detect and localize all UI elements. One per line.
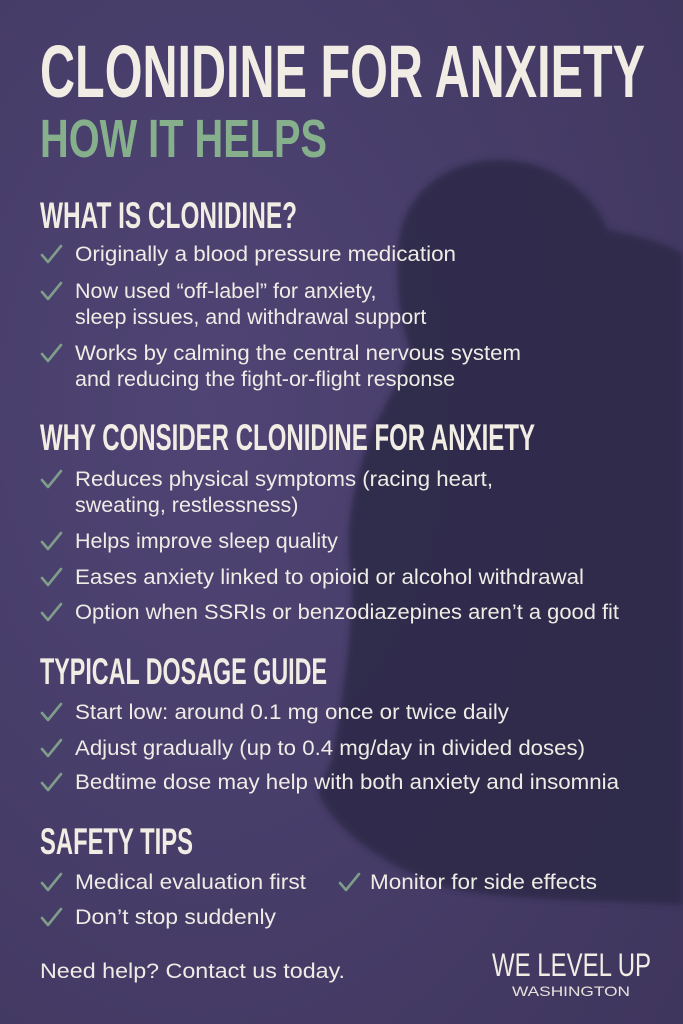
section: dosage: [40, 651, 619, 794]
logo: [492, 947, 651, 999]
section: why consider: Reduces physical symptoms (racing heart,: [75, 467, 493, 491]
section: what is clonidine: and reducing the fight-or-flight response: [75, 367, 455, 391]
section: why consider: Option when SSRIs or benzodiazepines aren’t a good fit: [75, 600, 619, 624]
subtitle: HOW IT HELPS: [40, 109, 327, 169]
section: what is clonidine: Originally a blood pressure medication: [75, 242, 456, 266]
section: dosage: Bedtime dose may help with both anxiety and insomnia: [75, 770, 619, 794]
section: dosage: Start low: around 0.1 mg once or twice daily: [75, 700, 509, 724]
section: safety tips: Monitor for side effects: [370, 870, 597, 894]
section: what is clonidine: WHAT IS CLONIDINE?: [40, 195, 297, 236]
section: why consider: sweating, restlessness): [75, 493, 298, 517]
section: what is clonidine: sleep issues, and withdrawal support: [75, 305, 426, 329]
logo: WASHINGTON: [512, 983, 630, 999]
section: safety tips: Medical evaluation first: [75, 870, 306, 894]
section: why consider: [40, 417, 619, 624]
call to action: Need help? Contact us today.: [40, 960, 345, 983]
section: what is clonidine: [40, 195, 521, 391]
section: what is clonidine: Works by calming the central nervous system: [75, 341, 521, 365]
section: safety tips: SAFETY TIPS: [40, 821, 193, 862]
section: safety tips: Don’t stop suddenly: [75, 905, 276, 929]
section: why consider: Eases anxiety linked to opioid or alcohol withdrawal: [75, 565, 584, 589]
section: dosage: TYPICAL DOSAGE GUIDE: [40, 651, 327, 692]
section: dosage: Adjust gradually (up to 0.4 mg/day in divided doses): [75, 736, 585, 760]
section: what is clonidine: Now used “off-label” for anxiety,: [75, 279, 377, 303]
section: safety tips: [40, 821, 597, 929]
silhouette: hunched person: [318, 160, 683, 905]
section: why consider: Helps improve sleep quality: [75, 529, 338, 553]
